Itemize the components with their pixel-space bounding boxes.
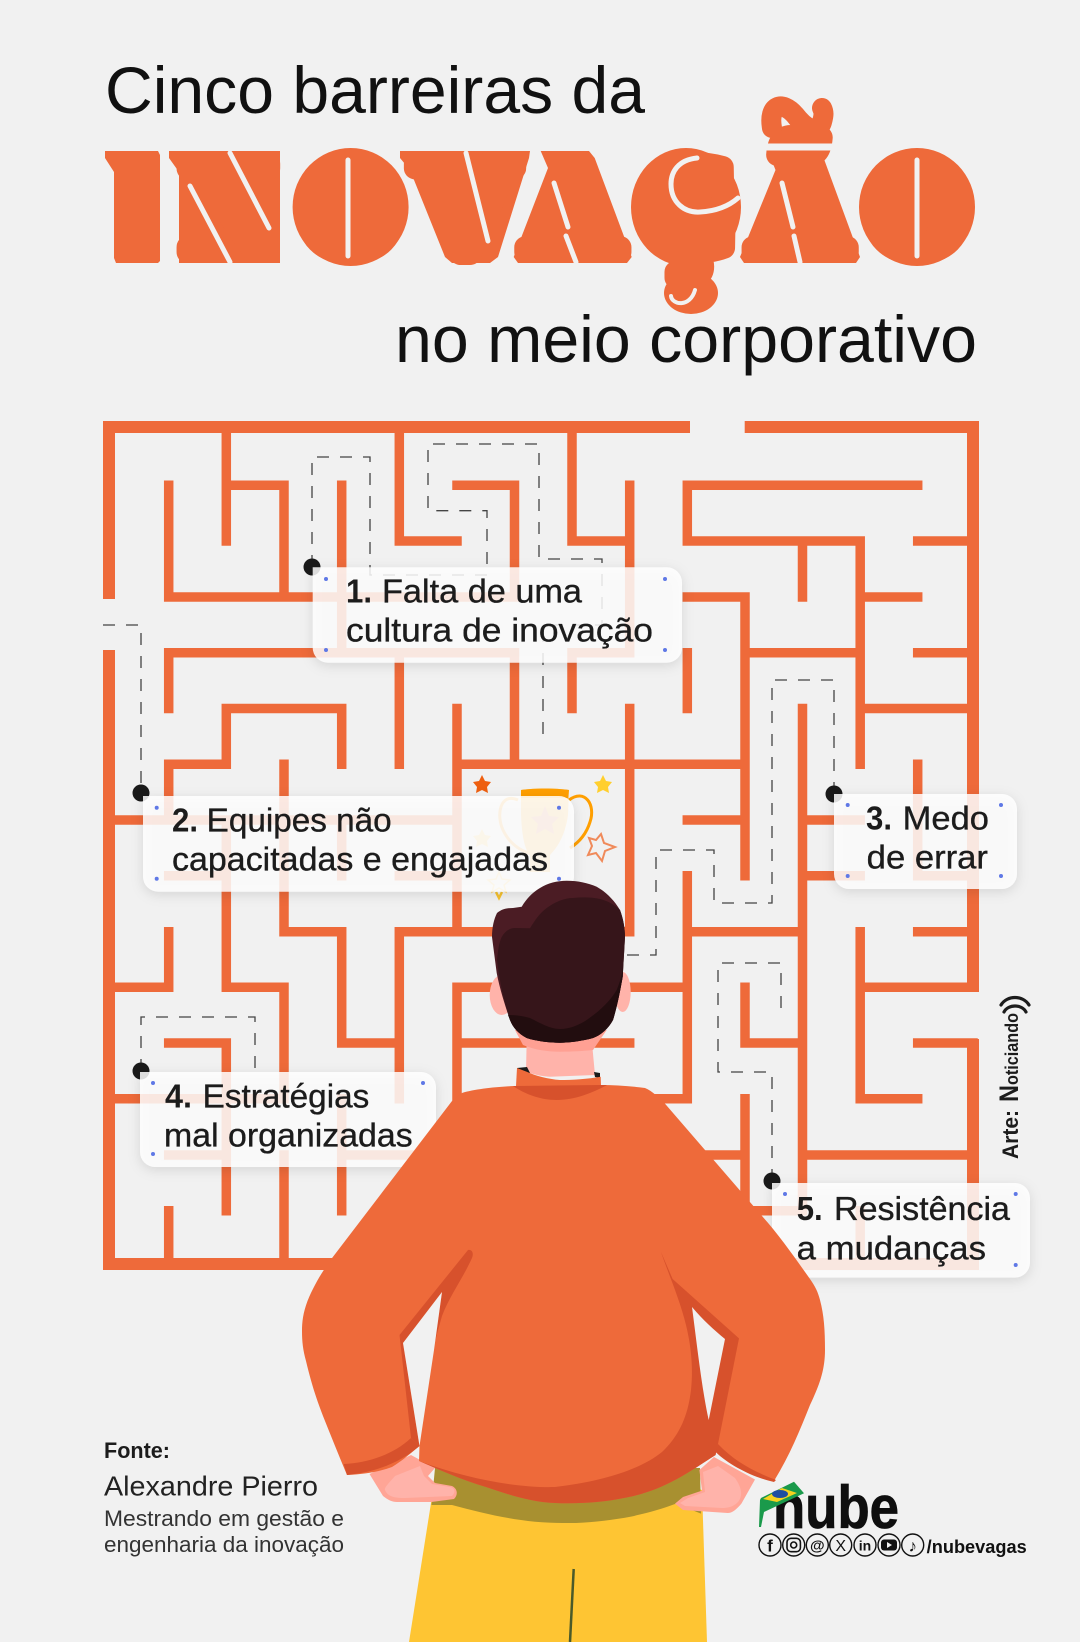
social icons row: in xyxy=(859,1538,871,1554)
source block xyxy=(104,1438,344,1557)
start dots xyxy=(132,558,842,1190)
source block: Fonte: xyxy=(104,1438,170,1463)
maze xyxy=(109,427,973,1264)
panel: card 1 xyxy=(313,567,682,663)
title: INOVAÇÃO headline: I xyxy=(120,132,154,282)
logo: nube: nube xyxy=(773,1474,899,1541)
illustration: man seen from behind xyxy=(302,881,825,1642)
title: last line: no meio corporativo xyxy=(395,302,977,376)
panel: card 2: capacitadas e engajadas xyxy=(172,841,548,878)
credit: Arte Noticiando xyxy=(994,998,1029,1159)
panel: card 1: 1. xyxy=(346,573,372,610)
icon: trophy with stars xyxy=(473,775,615,898)
panel: card 4 xyxy=(140,1072,436,1167)
panel: card 2: Equipes não xyxy=(207,802,392,839)
dashed paths through the maze xyxy=(103,444,834,1181)
title: first line: Cinco barreiras da xyxy=(105,53,645,127)
source block: Alexandre Pierro xyxy=(104,1471,318,1502)
title: INOVAÇÃO headline: O xyxy=(300,131,402,281)
panel: card 1: Falta de uma xyxy=(382,573,583,610)
social icons row: f xyxy=(767,1536,773,1556)
handle text: /nubevagas xyxy=(927,1537,1027,1557)
title: INOVAÇÃO headline: Ã xyxy=(751,133,849,282)
panel: card 4: 4. xyxy=(165,1077,192,1114)
panel: card 4: Estratégias xyxy=(203,1077,369,1114)
panel: card 4: mal organizadas xyxy=(164,1117,413,1154)
social icons row: ♪ xyxy=(908,1536,917,1556)
title: INOVAÇÃO headline xyxy=(105,106,975,314)
title: INOVAÇÃO headline: O xyxy=(866,131,968,281)
credit: Arte Noticiando: Arte: xyxy=(998,1110,1023,1159)
panel: card 5: a mudanças xyxy=(797,1229,986,1266)
title: INOVAÇÃO headline: V xyxy=(414,132,516,281)
panel: card 2: 2. xyxy=(172,802,198,839)
social icons row: @ xyxy=(810,1538,825,1554)
panel: card 2 xyxy=(143,796,574,892)
credit: Arte Noticiando: oticiando xyxy=(1002,1013,1022,1085)
title: INOVAÇÃO headline: A xyxy=(524,133,621,282)
panel: card 5 xyxy=(772,1183,1030,1278)
panel: card 1: cultura de inovação xyxy=(346,612,653,649)
source block: Mestrando em gestão e xyxy=(104,1506,344,1531)
panel: card 3: 3. xyxy=(866,799,892,836)
social icons row xyxy=(759,1534,924,1556)
panel: card 3: Medo xyxy=(903,799,989,836)
social icons row: X xyxy=(835,1538,846,1555)
credit: Arte Noticiando: N xyxy=(994,1085,1024,1102)
title: INOVAÇÃO headline: N xyxy=(184,132,272,281)
panel: card 5: 5. xyxy=(797,1190,823,1227)
source block: engenharia da inovação xyxy=(104,1532,344,1557)
panel: card 5: Resistência xyxy=(834,1190,1011,1227)
title: INOVAÇÃO headline: Ç xyxy=(637,133,735,282)
panel: card 3 xyxy=(834,794,1017,889)
panel: card 3: de errar xyxy=(867,838,988,875)
